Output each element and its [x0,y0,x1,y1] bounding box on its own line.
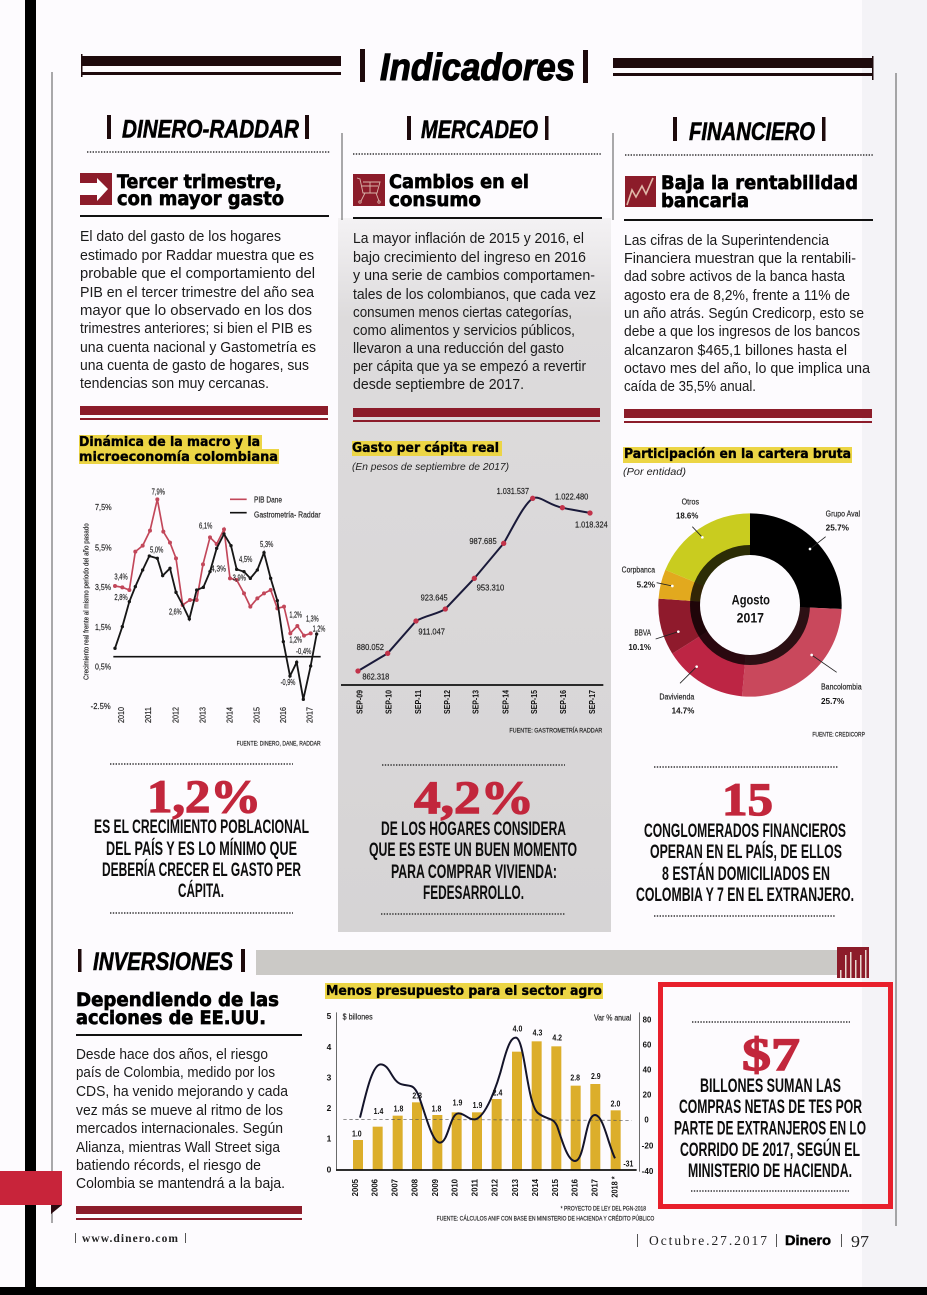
stat: 4,2%: 4,2% [414,772,534,824]
chart title: participación [623,446,852,478]
text block: superintendencia: debe a que los ingresos de los bancos [624,324,860,340]
footer: date and page [637,1232,870,1251]
axis and data labels: 2,8% [114,592,128,602]
bar chart: presupuesto agro [327,1011,655,1223]
axis and data labels: 2017 [305,707,315,723]
text block: superintendencia: caída de 35,5% anual. [624,379,756,395]
heading: dependiendo [76,989,279,1029]
heading: mercadeo: MERCADEO [421,116,538,144]
text block: inflación: desde septiembre de 2017. [353,377,524,393]
panel: financiero [622,117,874,916]
footer: date and page: 97 [851,1232,870,1251]
panel: grey column background [338,218,611,932]
axis and data labels: -0,4% [296,646,312,656]
legend [230,495,321,519]
bar chart labels: 4.3 [533,1028,542,1038]
bar chart labels: -31 [623,1158,633,1168]
bar chart labels: 5 [327,1011,331,1021]
icon: arrow [80,173,112,205]
heading: baja la rentabilidad [661,172,858,212]
stat: 4,2%: DE LOS HOGARES CONSIDERA [381,819,566,840]
bar chart labels: 4.0 [513,1023,522,1033]
stat: 15: 8 ESTÁN DOMICILIADOS EN [662,863,830,885]
axis and data labels: 1,5% [95,622,111,632]
bar chart labels: 1.9 [453,1098,462,1108]
axis and data labels: 2014 [225,707,235,723]
callout: $7 billones: $7 [742,1029,800,1081]
bar chart labels: 0 [644,1115,649,1125]
donut labels: Grupo Aval [826,509,860,519]
bar chart labels: 60 [643,1039,651,1049]
bar chart labels: 2.3 [412,1091,422,1101]
legend: PIB Dane [254,495,282,505]
donut labels: BBVA [634,628,651,638]
panel: mercadeo [341,116,608,914]
text block: dato del gasto: El dato del gasto de los hogares [80,229,281,245]
text block: riesgo país [76,1047,289,1192]
text block: inflación: tales de los colombianos, que cada vez [353,287,596,303]
bar chart labels: 1.8 [432,1103,441,1113]
bar chart labels: 2014 [530,1179,540,1196]
donut labels: Otros [682,497,700,507]
heading: baja la rentabilidad: Baja la rentabilidad [661,172,858,194]
bar chart labels: 4 [327,1042,331,1052]
bar chart labels: 2.9 [591,1071,601,1081]
axis and data labels: 0,5% [95,661,111,671]
donut labels: Corpbanca [622,565,655,575]
donut chart: cartera bruta [622,497,865,739]
bar chart labels: 40 [643,1065,651,1075]
text block: superintendencia: un año atrás. Según Credicorp, esto se [624,306,864,322]
data labels: SEP-17 [587,690,597,714]
axis and data labels: 2012 [170,707,180,723]
data labels: 1.018.324 [575,519,608,529]
axis and data labels: 2015 [251,707,261,723]
right page margin tint [862,0,927,1287]
footer: website: www.dinero.com [82,1233,178,1245]
axis and data labels: 4,5% [239,554,253,564]
heading: tercer trimestre: con mayor gasto [117,188,284,210]
text block: dato del gasto [80,229,316,392]
text block: dato del gasto: tendencias son muy cercanas. [80,376,269,392]
axis and data labels: 3,4% [114,571,128,581]
axis and data labels: 2016 [278,707,288,723]
stat: 1,2%: ES EL CRECIMIENTO POBLACIONAL [94,817,309,838]
donut labels: Agosto [732,591,770,607]
bar chart labels: 2006 [370,1179,380,1196]
bar chart labels: 2009 [430,1179,440,1196]
bar chart labels: 0 [327,1165,331,1175]
text block: superintendencia [624,233,871,395]
donut labels: 10.1% [628,642,651,652]
donut labels: Bancolombia [821,681,862,691]
axis and data labels: 5,0% [150,544,164,554]
legend: Gastrometría- Raddar [254,509,321,519]
text block: superintendencia: octavo mes del año, lo que implica una [624,361,871,377]
axis and data labels [81,486,326,748]
bar chart labels: 2016 [570,1179,580,1196]
stat: 1,2%: CÁPITA. [178,880,224,902]
icon: shopping cart [353,174,385,206]
donut labels: 14.7% [672,705,695,715]
donut labels [622,497,865,739]
text block: riesgo país: Colombia se mantendrá a la baja. [76,1176,285,1192]
donut labels: 5.2% [637,579,655,589]
text block: inflación: consumen menos ciertas categorías, [353,305,572,321]
heading: dinero-raddar: DINERO-RADDAR [122,116,299,144]
chart title: dinámica: Dinámica de la macro y la [79,434,260,450]
data labels: 987.685 [469,536,497,546]
data labels: 953.310 [477,583,504,593]
data labels: SEP-12 [442,690,452,714]
stat: 15 [636,774,854,906]
text block: superintendencia: Financiera muestran que la rentabili- [624,251,856,267]
stat: 1,2%: 1,2% [147,771,261,823]
heading: tercer trimestre: Tercer trimestre, [117,171,282,193]
donut labels: 25.7% [826,523,849,533]
bar chart labels: 2.8 [570,1072,580,1082]
axis and data labels: 1,2% [289,610,302,620]
footer: date and page: Octubre.27.2017 [649,1233,767,1248]
bar chart labels: -40 [642,1166,653,1176]
axis and data labels: 1,3% [306,614,319,624]
line chart: gasto per cápita [341,486,608,735]
text block: dato del gasto: estimado por Raddar muestra que es [80,248,314,264]
text block: riesgo país: Alianza, mientras Wall Street siga [76,1140,281,1156]
red ribbon tab [0,1171,62,1214]
data labels: 1.022.480 [555,491,588,501]
axis and data labels: Crecimiento real frente al mismo periodo del año pasado [81,523,90,680]
callout: $7 billones [660,984,890,1206]
heading: cambios en el consumo [389,171,529,211]
data labels: SEP-10 [384,690,394,714]
text block: superintendencia: alcanzaron $465,1 billones hasta el [624,343,847,359]
bar chart labels: 2007 [390,1179,400,1196]
text block: inflación: per cápita que ya se empezó a revertir [353,359,586,375]
axis and data labels: 4,3% [211,564,226,574]
title [81,47,874,89]
data labels: SEP-09 [355,690,365,714]
line chart: macro y microeconomía [81,486,326,748]
heading: dependiendo: Dependiendo de las [76,989,279,1011]
data labels: SEP-15 [529,690,539,714]
data labels: FUENTE: GASTROMETRÍA RADDAR [509,726,603,735]
bar chart labels: 2013 [510,1179,520,1196]
axis and data labels: -2.5% [91,701,111,711]
bar chart labels: 1.4 [374,1106,383,1116]
axis and data labels: 1,2% [313,623,326,633]
axis and data labels: 3,9% [233,573,246,583]
bar chart labels: 2015 [550,1179,560,1196]
heading: financiero: FINANCIERO [689,118,815,146]
bar chart labels: Var % anual [594,1013,631,1023]
data labels: 911.047 [418,627,445,637]
axis and data labels: 7,9% [152,486,165,496]
text block: riesgo país: Desde hace dos años, el riesgo [76,1047,268,1063]
text block: dato del gasto: mayor que lo observado en los dos [80,303,312,319]
axis and data labels: 6,1% [199,521,213,531]
stat: 1,2%: DEBERÍA CRECER EL GASTO PER [102,859,301,881]
stat: 4,2%: FEDESARROLLO. [423,883,524,904]
text block: dato del gasto: PIB en el tercer trimestre del año sea [80,285,315,301]
bar chart labels: * PROYECTO DE LEY DEL PGN-2018 [561,1206,647,1212]
stat: 1,2% [94,771,309,902]
panel: inversiones [76,947,890,1223]
text block: superintendencia: agosto era de 8,2%, frente a 11% de [624,288,850,304]
callout: $7 billones: BILLONES SUMAN LAS [700,1076,841,1097]
data labels: SEP-16 [558,690,568,714]
text block: riesgo país: CDS, ha venido mejorando y cada [76,1084,289,1100]
bar chart labels: 2010 [450,1179,460,1196]
axis and data labels: 3,5% [95,582,111,592]
bar chart labels: $ billones [343,1011,373,1021]
text block: inflación: La mayor inflación de 2015 y 2016, el [353,231,584,247]
data labels: 1.031.537 [497,486,529,496]
left black binding bar [25,0,36,1290]
data labels: 923.645 [421,592,448,602]
bar chart labels: 2005 [350,1179,360,1196]
axis and data labels: 5,5% [95,543,112,553]
text block: dato del gasto: probable que el comportamiento del [80,266,315,282]
data labels: SEP-11 [413,690,423,714]
bar chart labels: 2.4 [493,1088,502,1098]
chart title: gasto per cápita: (En pesos de septiembre de 2017) [352,461,509,473]
axis and data labels: 2013 [198,707,208,723]
heading: cambios en el consumo: Cambios en el [389,171,529,193]
bar chart labels: FUENTE: CÁLCULOS ANIF CON BASE EN MINISTERIO DE HACIENDA Y CRÉDITO PÚBLICO [437,1216,655,1223]
heading: dependiendo: acciones de EE.UU. [76,1007,266,1029]
bar chart labels: -20 [642,1140,653,1150]
heading: baja la rentabilidad: bancaria [661,190,749,212]
bar chart labels: 2018 * [610,1176,620,1198]
text block: inflación: como alimentos y servicios públicos, [353,323,575,339]
heading: cambios en el consumo: consumo [389,189,481,211]
data labels: 880.052 [357,642,384,652]
chart title: dinámica: microeconomía colombiana [79,449,278,465]
title: Indicadores [380,47,575,89]
text block: dato del gasto: trimestres anteriores; si bien el PIB es [80,321,312,337]
footer: date and page: Dinero [785,1232,831,1248]
bar chart labels: 2008 [409,1179,419,1196]
axis and data labels: 2011 [143,707,153,723]
text block: dato del gasto: una cuenta de gasto de hogares, sus [80,358,309,374]
bar chart labels: 1.0 [352,1128,362,1138]
donut labels: 2017 [737,610,764,626]
data labels [355,486,608,735]
text block: riesgo país: vez más se mueve al ritmo de los [76,1103,283,1119]
chart title: participación: Participación en la cartera bruta [624,446,851,462]
bar chart labels: 2017 [590,1179,600,1196]
bar chart labels: 2012 [490,1179,500,1196]
text block: superintendencia: Las cifras de la Superintendencia [624,233,830,249]
text block: riesgo país: mercados internacionales. Según [76,1121,283,1137]
stat: 4,2% [369,772,577,904]
donut labels: 25.7% [821,696,845,706]
bar chart labels: 2.0 [611,1098,620,1108]
icon: bars [837,947,869,978]
grey band [256,950,838,975]
chart title: gasto per cápita [352,440,509,473]
text block: riesgo país: batiendo récords, el riesgo de [76,1158,261,1174]
chart title: participación: (Por entidad) [623,466,686,478]
axis and data labels: 2010 [116,707,126,723]
bar chart labels: 1.9 [473,1100,482,1110]
chart title: dinámica [79,434,279,465]
axis and data labels: 5,3% [260,539,274,549]
heading: inversiones: INVERSIONES [93,948,233,976]
text block: dato del gasto: una cuenta nacional y Gastometría es [80,340,316,356]
data labels: SEP-13 [471,690,481,714]
bar chart labels: 3 [327,1072,331,1082]
bar chart labels: 2011 [470,1179,480,1196]
text block: riesgo país: país de Colombia, medido por los [76,1065,275,1081]
donut labels: 18.6% [676,511,699,521]
bottom black strip [0,1287,927,1295]
stat: 15: 15 [722,774,773,826]
chart title: menos presupuesto: Menos presupuesto para el sector agro [326,984,602,999]
axis and data labels: -0,9% [281,677,296,687]
axis and data labels: 2,6% [169,606,182,616]
bar chart labels: 4.2 [552,1033,562,1043]
axis and data labels: 7,5% [95,502,112,512]
panel: dinero-raddar [79,115,330,913]
text block: inflación: y una serie de cambios comportamen- [353,268,595,284]
data labels: SEP-14 [500,690,510,714]
donut labels: FUENTE: CREDICORP [812,732,865,739]
bar chart labels: 20 [643,1090,651,1100]
stat: 1,2%: DEL PAÍS Y ES LO MÍNIMO QUE [106,838,297,860]
bar chart labels: 1 [327,1134,331,1144]
chart title: gasto per cápita: Gasto per cápita real [352,440,499,456]
text block: inflación [353,231,596,393]
stat: 4,2%: QUE ES ESTE UN BUEN MOMENTO [369,840,577,861]
text block: inflación: bajo crecimiento del ingreso en 2016 [353,250,586,266]
text block: superintendencia: dad sobre activos de la banca hasta [624,269,846,285]
text block: inflación: llevaron a una reducción del gasto [353,341,564,357]
bar chart labels [327,1011,655,1223]
stat: 4,2%: PARA COMPRAR VIVIENDA: [391,862,557,883]
icon: falling chart [625,176,656,207]
donut labels: Davivienda [659,691,694,701]
bar chart labels: 1.8 [394,1103,403,1113]
bar chart labels: 80 [643,1015,651,1025]
bar chart labels: 2 [327,1103,331,1113]
axis and data labels: FUENTE: DINERO, DANE, RADDAR [237,741,321,748]
data labels: 862.318 [362,672,389,682]
axis and data labels: 1,2% [289,635,302,645]
leader lines [656,527,837,683]
heading: tercer trimestre [117,171,284,210]
